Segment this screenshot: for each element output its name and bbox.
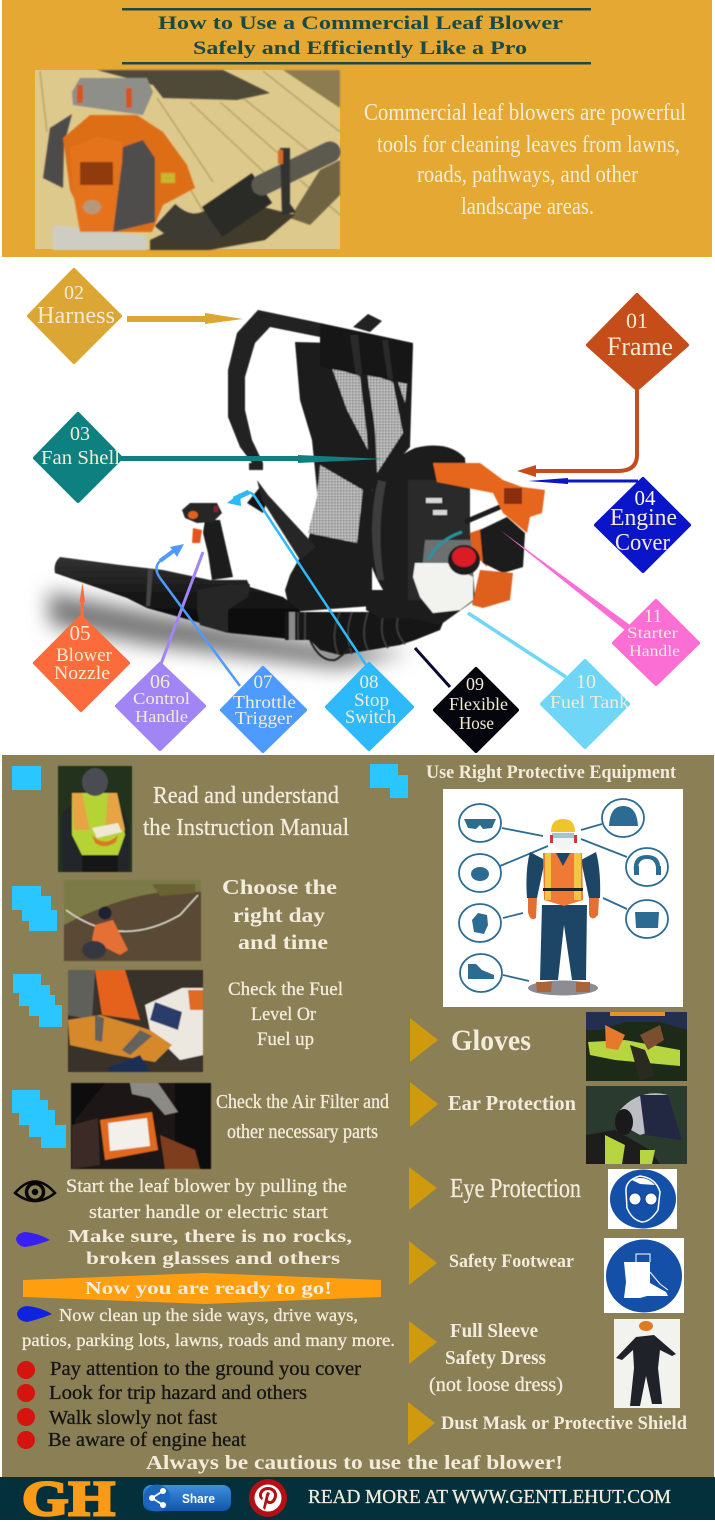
illustration: worker with protective equipment: [443, 789, 683, 1007]
arrow: throttle trigger: [156, 544, 240, 686]
diamond: 06 Control Handle: 06: [150, 671, 170, 693]
panel: footer: [0, 1470, 715, 1526]
diamond: 07 Throttle Trigger: [222, 668, 305, 751]
item: gloves: [410, 1012, 687, 1081]
banner: ready to go: Now you are ready to go!: [85, 1278, 332, 1298]
title: Safely and Efficiently Like a Pro: [193, 38, 527, 59]
item: safety footwear: [409, 1238, 684, 1313]
intro text: roads, pathways, and other: [417, 162, 638, 188]
diamond: 08 Stop Switch: [327, 664, 412, 749]
title: How to Use a Commercial Leaf Blower: [158, 13, 564, 34]
step 4 text: Check the Air Filter and: [216, 1091, 389, 1113]
photo: leaf blower on wooden deck: [35, 70, 340, 250]
item: full sleeve safety dress: (not loose dress): [429, 1374, 563, 1396]
arrow: blower nozzle: [80, 583, 85, 622]
arrow: starter handle: [500, 530, 630, 631]
diamond: 07 Throttle Trigger: Throttle: [233, 692, 296, 712]
diamond: 06 Control Handle: Handle: [135, 707, 188, 726]
diamond: 03 Fan Shell: 03: [70, 423, 90, 445]
item: ear protection: [410, 1082, 687, 1164]
diamond: 04 Engine Cover: Engine: [610, 505, 677, 531]
illustration: backpack blower: [55, 310, 545, 660]
item: safety footwear: Safety Footwear: [449, 1251, 575, 1272]
diamond: 11 Starter Handle: 11: [644, 606, 662, 627]
diamond: 02 Harness: [29, 270, 120, 362]
start text: [66, 1176, 347, 1223]
arrow: fan shell: [120, 455, 385, 463]
read more link: READ MORE AT WWW.GENTLEHUT.COM: [308, 1486, 671, 1508]
arrow: frame: [517, 390, 637, 477]
diamond: 08 Stop Switch: Stop: [354, 690, 389, 711]
diamond: 05 Blower Nozzle: [35, 617, 128, 710]
item: ear protection: Ear Protection: [448, 1091, 576, 1115]
arrow: engine cover: [528, 478, 638, 484]
step 3 text: [228, 979, 343, 1050]
diamond: 11 Starter Handle: Starter: [627, 625, 679, 642]
arrow: fuel tank: [468, 613, 566, 677]
diamond: 09 Flexible Hose: [435, 669, 517, 751]
list: cautions: Look for trip hazard and others: [49, 1382, 307, 1404]
step 4 photo: air filter check: [71, 1083, 211, 1169]
diamond: 04 Engine Cover: [596, 479, 689, 571]
diamond: 09 Flexible Hose: Hose: [459, 713, 494, 733]
step 1 text: the Instruction Manual: [143, 815, 349, 841]
step 2 marker: [12, 886, 57, 931]
step 1 photo: worker reading manual: [58, 766, 132, 872]
closing caution: Always be cautious to use the leaf blower!: [146, 1452, 563, 1474]
diamond: 05 Blower Nozzle: Blower: [56, 645, 113, 666]
step 3 text: Level Or: [251, 1004, 317, 1025]
diamond: 10 Fuel Tank: Fuel Tank: [550, 692, 629, 712]
icon: blue pointer one: [16, 1232, 50, 1247]
arrow: harness: [127, 313, 243, 324]
item: gloves: Gloves: [451, 1024, 531, 1057]
step 1 marker: [12, 766, 41, 790]
diamond: 09 Flexible Hose: 09: [466, 674, 484, 694]
panel: steps and protective equipment: [2, 755, 714, 1477]
step 4 text: [216, 1091, 389, 1143]
diamond: 05 Blower Nozzle: 05: [70, 621, 90, 645]
step 2 text: and time: [238, 930, 328, 954]
diamond: 09 Flexible Hose: Flexible: [449, 694, 508, 714]
diamond: 04 Engine Cover: Cover: [615, 530, 670, 556]
icon: eye: [15, 1182, 55, 1201]
diamond: 06 Control Handle: Control: [133, 689, 190, 708]
item: full sleeve safety dress: [409, 1319, 680, 1408]
arrow: control handle: [161, 552, 203, 664]
step 1 text: [143, 783, 349, 841]
diamond: 10 Fuel Tank: 10: [576, 671, 596, 693]
diamond: 02 Harness: Harness: [37, 303, 115, 329]
step 4 marker: [12, 1090, 66, 1148]
item: dust mask or protective shield: [408, 1402, 687, 1445]
start text: Start the leaf blower by pulling the: [66, 1176, 347, 1197]
intro text: [364, 100, 686, 220]
diamond: 08 Stop Switch: 08: [360, 672, 378, 693]
logo: GH: GH: [22, 1470, 115, 1526]
diamond: 11 Starter Handle: Handle: [629, 643, 680, 660]
step 3 marker: [13, 974, 62, 1027]
step 4 text: other necessary parts: [227, 1121, 378, 1143]
intro text: landscape areas.: [461, 194, 594, 220]
list: cautions: [17, 1358, 361, 1451]
panel: leaf blower parts diagram: [29, 270, 698, 751]
step 2 text: right day: [233, 903, 326, 927]
list: cautions: Walk slowly not fast: [49, 1407, 217, 1429]
item: full sleeve safety dress: Safety Dress: [445, 1347, 546, 1369]
item: dust mask or protective shield: Dust Mask or Protective Shield: [441, 1413, 687, 1434]
diamond: 08 Stop Switch: Switch: [345, 707, 396, 728]
diamond: 01 Frame: 01: [626, 308, 648, 333]
diamond: 07 Throttle Trigger: Trigger: [235, 708, 292, 728]
step 2 photo: operator on leaf-covered lawn: [64, 880, 201, 961]
arrow: flexible hose: [415, 648, 450, 687]
button: share: Share: [182, 1491, 215, 1506]
clean up text: [22, 1305, 395, 1350]
item: full sleeve safety dress: Full Sleeve: [450, 1320, 538, 1342]
diamond: 05 Blower Nozzle: Nozzle: [54, 663, 110, 684]
start text: starter handle or electric start: [89, 1202, 329, 1223]
item: eye protection: Eye Protection: [450, 1173, 581, 1203]
list: cautions: Pay attention to the ground you cover: [50, 1358, 361, 1380]
step 1 text: Read and understand: [153, 783, 339, 809]
diamond: 01 Frame: [588, 295, 687, 389]
clean up text: Now clean up the side ways, drive ways,: [59, 1305, 358, 1325]
step 3 photo: fuel tank and gloves: [68, 970, 203, 1072]
arrow: stop switch: [227, 492, 366, 665]
step 3 text: Check the Fuel: [228, 979, 343, 1000]
diamond: 01 Frame: Frame: [607, 332, 673, 361]
step 2 text: Choose the: [222, 875, 337, 899]
diamond: 10 Fuel Tank: [542, 661, 629, 747]
diamond: 07 Throttle Trigger: 07: [254, 672, 272, 693]
step 3 text: Fuel up: [257, 1029, 314, 1050]
check text: [68, 1226, 352, 1268]
check text: Make sure, there is no rocks,: [68, 1226, 352, 1246]
diamond: 04 Engine Cover: 04: [634, 486, 656, 510]
step 2 text: [222, 875, 337, 954]
clean up text: patios, parking lots, lawns, roads and many more.: [22, 1330, 395, 1350]
diamond: 03 Fan Shell: [35, 414, 121, 501]
ground shadow: [48, 592, 410, 668]
list: cautions: Be aware of engine heat: [48, 1429, 246, 1451]
diamond: 02 Harness: 02: [64, 282, 84, 304]
item: eye protection: [409, 1167, 677, 1229]
banner: ready to go: [23, 1273, 381, 1304]
equipment heading: Use Right Protective Equipment: [426, 762, 677, 783]
check text: broken glasses and others: [86, 1248, 340, 1268]
icon: pinterest: [249, 1479, 287, 1517]
button: share: [143, 1484, 231, 1512]
diamond: 11 Starter Handle: [614, 601, 698, 684]
icon: blue pointer two: [17, 1306, 52, 1322]
diamond: 03 Fan Shell: Fan Shell: [41, 447, 120, 469]
panel: header: [2, 0, 712, 257]
diamond: 06 Control Handle: [117, 664, 204, 749]
title: [122, 8, 591, 64]
equipment marker: [370, 764, 408, 798]
